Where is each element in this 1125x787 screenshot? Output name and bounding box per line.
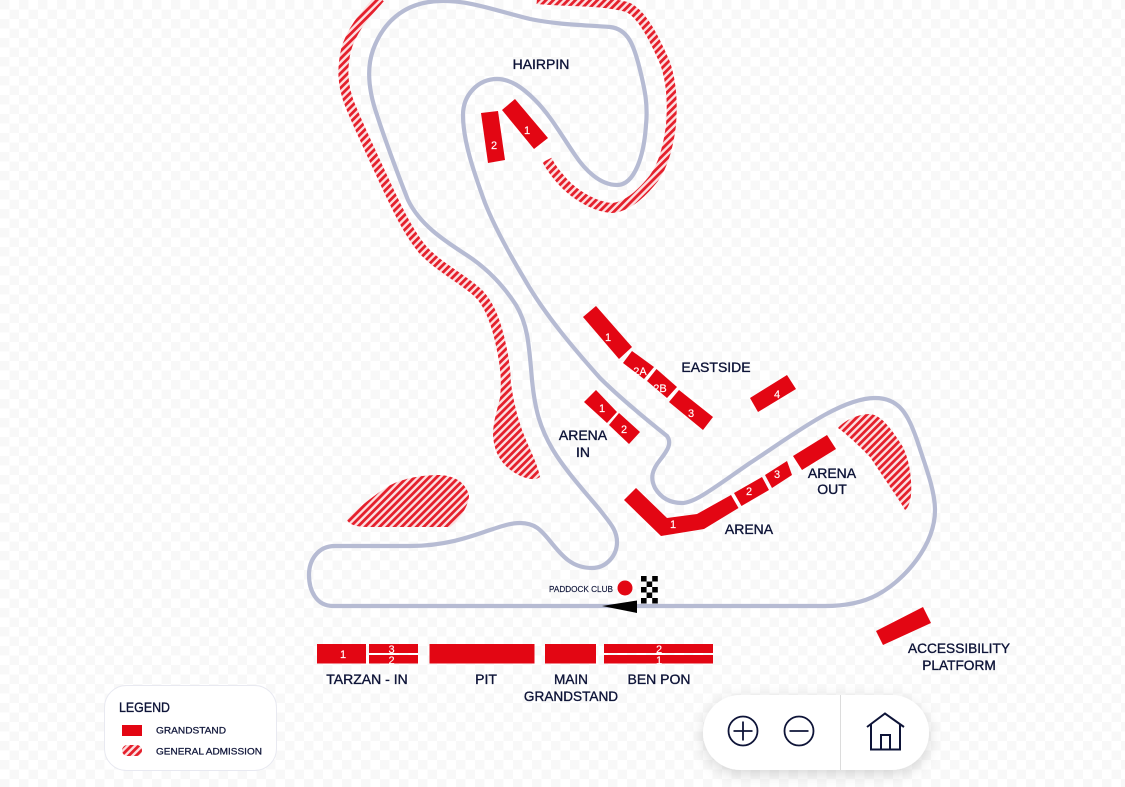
grandstands: eastside: 4: [774, 389, 780, 401]
grandstands: arena: 2: [746, 486, 752, 498]
grandstand: main: [545, 644, 596, 664]
label: arena out: OUT: [817, 481, 847, 497]
grandstands: tarzan - in: [317, 644, 418, 667]
label: arena in: IN: [576, 444, 590, 460]
grandstands: hairpin: 2: [491, 140, 497, 152]
grandstands: tarzan - in: 1: [340, 649, 346, 661]
label: ben pon: BEN PON: [627, 671, 691, 687]
label: hairpin: HAIRPIN: [513, 56, 569, 72]
legend panel: [104, 686, 276, 770]
legend item: grandstand: [122, 725, 226, 736]
grandstand: pit: [430, 644, 534, 664]
grandstands: eastside: 2A: [633, 366, 647, 378]
grandstands: tarzan - in: 2: [388, 655, 395, 667]
grandstands: arena: 1: [670, 519, 676, 531]
label: tarzan - in: TARZAN - IN: [326, 671, 408, 687]
legend item: grandstand: GRANDSTAND: [156, 726, 226, 736]
paddock club marker: PADDOCK CLUB: [549, 584, 613, 594]
label: main grandstand: MAIN: [554, 672, 588, 687]
label: main grandstand: GRANDSTAND: [524, 689, 618, 704]
label: arena out: ARENA: [808, 465, 856, 481]
grandstands: hairpin: [481, 99, 548, 163]
grandstands: hairpin: 1: [524, 125, 530, 137]
general admission areas: [343, 0, 911, 527]
label: accessibility platform: PLATFORM: [922, 658, 996, 673]
icon: zoom out: [784, 716, 814, 746]
grandstands: eastside: 3: [688, 408, 694, 420]
label: eastside: EASTSIDE: [681, 359, 751, 375]
legend item: general admission: [122, 745, 262, 758]
grandstands: tarzan - in: 3: [388, 644, 395, 656]
grandstands: eastside: [583, 306, 796, 430]
icon: chequered flag: [641, 576, 658, 604]
icon: zoom in: [728, 716, 758, 746]
grandstands: arena in: [584, 390, 640, 444]
label: arena: ARENA: [725, 521, 774, 537]
grandstands: arena: 3: [774, 469, 780, 481]
label: pit: PIT: [475, 671, 497, 687]
grandstands: ben pon: 2: [656, 644, 662, 656]
grandstands: arena in: 1: [599, 403, 605, 415]
icon: home: [867, 714, 904, 750]
grandstands: eastside: 2B: [653, 383, 667, 395]
map controls: [703, 695, 929, 770]
legend item: general admission: GENERAL ADMISSION: [156, 746, 262, 758]
label: arena in: ARENA: [559, 427, 607, 443]
grandstands: ben pon: [604, 644, 713, 667]
legend title: LEGEND: [119, 699, 170, 715]
paddock club marker: [549, 580, 632, 596]
arrow: race direction: [602, 600, 637, 613]
grandstands: ben pon: 1: [656, 655, 662, 667]
label: accessibility platform: ACCESSIBILITY: [908, 641, 1010, 656]
grandstand: accessibility platform: [876, 607, 931, 645]
grandstands: eastside: 1: [605, 332, 611, 344]
grandstands: arena: [624, 435, 836, 536]
race track outline: [309, 1, 935, 606]
grandstands: arena in: 2: [621, 424, 627, 436]
